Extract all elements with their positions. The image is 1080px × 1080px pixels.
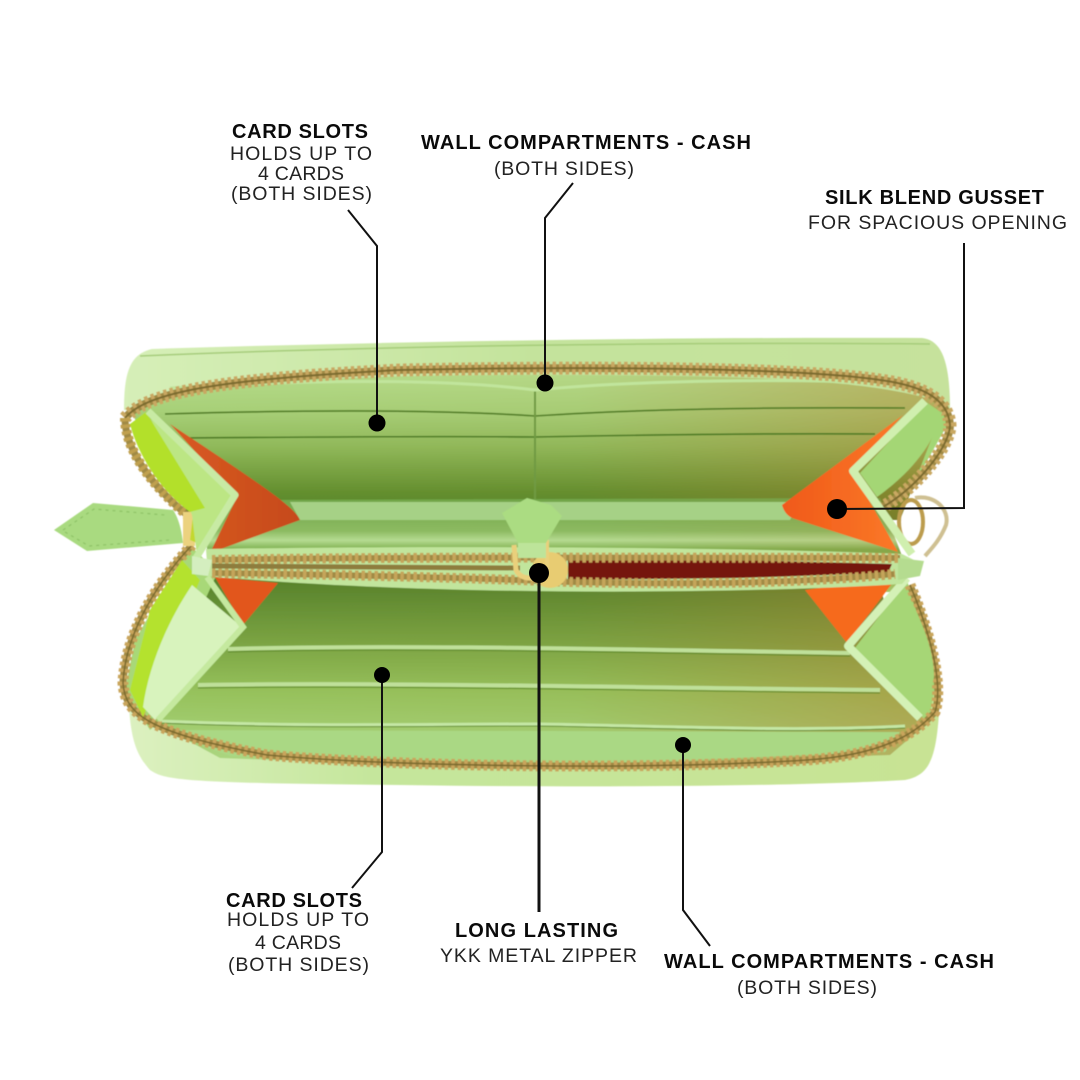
callout: silk blend gusset: SILK BLEND GUSSET xyxy=(825,187,1044,209)
inner pocket zipper xyxy=(192,547,924,592)
callout: card slots top: CARD SLOTS xyxy=(232,121,368,143)
callout: card slots bottom xyxy=(226,890,369,976)
gusset backing left and right xyxy=(125,400,950,730)
callout: card slots bottom: 4 CARDS xyxy=(255,932,341,954)
gusset lower left xyxy=(130,560,278,720)
top zipper xyxy=(125,368,950,516)
callout: card slots bottom: (BOTH SIDES) xyxy=(228,954,369,976)
callout: silk blend gusset xyxy=(808,187,1067,234)
callout: long lasting zipper: YKK METAL ZIPPER xyxy=(440,945,637,967)
upper interior panel xyxy=(130,375,945,520)
callout: card slots top xyxy=(230,121,372,205)
callout: long lasting zipper xyxy=(440,920,637,967)
callout: wall compartments top: (BOTH SIDES) xyxy=(494,158,634,180)
leader: card slots top xyxy=(348,210,386,432)
leader: silk blend gusset xyxy=(827,243,964,519)
leader: card slots bottom xyxy=(352,667,390,888)
callout: card slots top: HOLDS UP TO xyxy=(230,143,372,165)
gusset lower right xyxy=(805,577,934,719)
top leather edge xyxy=(124,338,950,420)
pull tab xyxy=(54,503,217,551)
bottom leather edge xyxy=(128,690,940,786)
callout: silk blend gusset: FOR SPACIOUS OPENING xyxy=(808,212,1067,234)
callout: wall compartments bottom: WALL COMPARTMENTS - CASH xyxy=(664,951,994,973)
gusset upper left xyxy=(130,411,300,558)
callout: card slots bottom: CARD SLOTS xyxy=(226,890,362,912)
middle pocket xyxy=(205,498,905,592)
lower slot edges xyxy=(228,647,850,653)
leader: wall compartments top xyxy=(536,183,573,392)
card slot lines xyxy=(165,408,905,416)
leader: long lasting zipper xyxy=(529,563,549,912)
callout: wall compartments bottom: (BOTH SIDES) xyxy=(737,977,877,999)
lower interior panel xyxy=(150,578,925,768)
leader: wall compartments bottom xyxy=(675,737,710,946)
callout: long lasting zipper: LONG LASTING xyxy=(455,920,618,942)
gusset upper right xyxy=(782,401,942,554)
zipper slider and puller xyxy=(502,498,568,588)
callout: wall compartments bottom xyxy=(664,951,994,999)
key rings xyxy=(899,497,947,556)
callout: card slots top: 4 CARDS xyxy=(258,163,344,185)
callout: wall compartments top: WALL COMPARTMENTS - CASH xyxy=(421,132,751,154)
callout: card slots top: (BOTH SIDES) xyxy=(231,183,372,205)
wallet photo illustration xyxy=(54,338,950,786)
callout: card slots bottom: HOLDS UP TO xyxy=(227,909,369,931)
callout: wall compartments top xyxy=(421,132,751,180)
bottom zipper xyxy=(123,545,938,766)
